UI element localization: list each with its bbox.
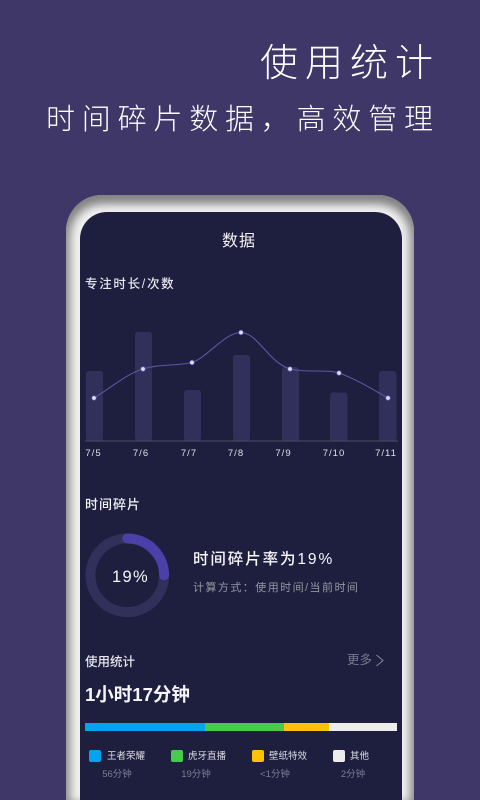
heading: usage statistics: 使用统计 [85,655,135,669]
legend: 虎牙直播: 虎牙直播 [188,751,226,762]
chart: focus bars and line [85,330,398,442]
icon: chevron [376,654,384,666]
screen title: 数据 [222,233,256,250]
stacked usage bar [85,723,397,731]
data points [92,330,390,400]
legend: 王者荣耀: 王者荣耀 [107,751,145,762]
segment: yellow [284,723,329,731]
title: 使用统计 [260,32,440,87]
subtitle: 时间碎片数据，高效管理 [46,96,440,138]
legend: 其他 [333,750,369,780]
axis label 7/8: 7/8 [228,448,244,459]
axis label 7/7: 7/7 [181,448,197,459]
legend: 虎牙直播 [171,750,226,780]
line series [94,332,388,398]
legend: 王者荣耀: 56分钟 [102,769,132,780]
axis label 7/6: 7/6 [133,448,149,459]
axis label 7/9: 7/9 [275,448,292,459]
segment: blue [85,723,205,731]
legend: 其他: 其他 [350,751,369,762]
legend: 虎牙直播: 19分钟 [181,769,211,780]
phone frame [66,195,414,800]
legend: 壁纸特效: <1分钟 [260,769,290,780]
phone screen [80,212,402,800]
legend: 王者荣耀 [89,750,145,780]
fragment formula: 计算方式：使用时间/当前时间 [193,582,359,594]
axis label 7/11: 7/11 [375,448,397,459]
segment: green [205,723,284,731]
more link: 更多 [347,653,372,667]
legend: 壁纸特效 [252,750,307,780]
total time: 1小时17分钟 [85,684,190,705]
legend: 其他: 2分钟 [341,769,365,780]
legend: 壁纸特效: 壁纸特效 [269,751,307,762]
bars [86,332,396,441]
axis label 7/10: 7/10 [323,448,345,459]
donut value: 19% [112,568,149,586]
heading: time fragments: 时间碎片 [85,497,141,512]
axis label 7/5: 7/5 [85,448,102,459]
donut chart [86,534,170,617]
heading: focus duration: 专注时长/次数 [85,277,175,291]
fragment rate headline: 时间碎片率为19% [193,551,334,568]
